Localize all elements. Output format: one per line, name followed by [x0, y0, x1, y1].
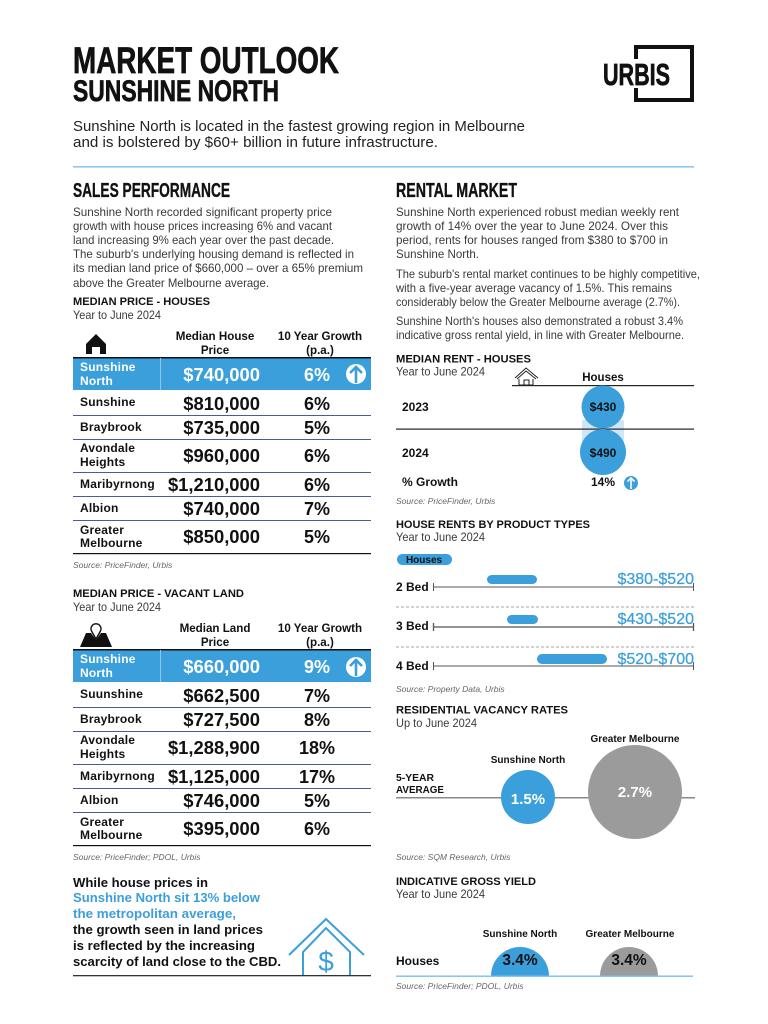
row: Albion: 5%: [304, 791, 330, 811]
text block: sales performance: its median land price of $660,000 – over a 65% premium: [73, 261, 363, 275]
row: Avondale Heights: [80, 441, 330, 469]
text block: rental market: considerably below the Greater Melbourne average (2.7%).: [396, 295, 680, 309]
text block: sales performance: growth with house prices increasing 6% and vacant: [73, 219, 333, 233]
row: Avondale Heights: 6%: [304, 446, 330, 466]
row: Maribyrnong: [80, 474, 330, 495]
half bubble: Sunshine North: Sunshine North: [483, 929, 557, 940]
row: Sunshine North: 6%: [304, 365, 330, 385]
table header: [176, 330, 362, 357]
intro text: Sunshine North is located in the fastest growing region in Melbourne: [73, 118, 525, 135]
source: Source: PriceFinder, Urbis: [396, 496, 496, 506]
row: 4 Bed: [396, 651, 694, 673]
bubble: Greater Melbourne: Greater Melbourne: [591, 734, 680, 745]
callout: the growth seen in land prices: [73, 922, 263, 937]
heading: median price vacant land: MEDIAN PRICE - VACANT LAND: [73, 588, 244, 600]
callout: is reflected by the increasing: [73, 938, 255, 953]
row: Albion: [80, 498, 330, 519]
row: Suunshine: [80, 685, 330, 706]
source: Source: PriceFinder; PDOL, Urbis: [396, 981, 524, 991]
text block: rental market: The suburb's rental market continues to be highly competitive,: [396, 267, 700, 281]
heading: median rent houses: MEDIAN RENT - HOUSES: [396, 354, 531, 366]
heading: vacancy: RESIDENTIAL VACANCY RATES: [396, 704, 568, 716]
row: Albion: $746,000: [183, 790, 260, 811]
source: Source: Property Data, Urbis: [396, 684, 505, 694]
row: 3 Bed: [396, 611, 694, 633]
row: Greater Melbourne: $850,000: [183, 526, 260, 547]
row label: Houses: [396, 954, 440, 968]
half bubble: Sunshine North: [483, 929, 557, 976]
bubble: Greater Melbourne: [588, 734, 682, 839]
row: Greater Melbourne: 5%: [304, 527, 330, 547]
text block: rental market: growth of 14% over the year to June 2024. Over this: [396, 219, 668, 233]
half bubble: Greater Melbourne: [586, 929, 675, 976]
heading: median price houses: Year to June 2024: [73, 308, 161, 322]
bubble: Sunshine North: Sunshine North: [491, 755, 565, 766]
table header: Price: [201, 344, 230, 357]
source: Source: PriceFinder, Urbis: [73, 560, 173, 570]
half bubble: Greater Melbourne: 3.4%: [611, 952, 647, 969]
row: Maribyrnong: 6%: [304, 475, 330, 495]
logo: Urbis: [603, 47, 692, 100]
row: Sunshine North: Sunshine: [80, 652, 136, 666]
row: Sunshine North: North: [80, 666, 113, 680]
heading: yield: Year to June 2024: [396, 887, 485, 901]
panel: indicative gross yield: [396, 876, 693, 991]
row: Sunshine: [80, 393, 330, 414]
row: Braybrook: 8%: [304, 710, 330, 730]
row: Albion: Albion: [80, 793, 119, 807]
row: Greater Melbourne: 6%: [304, 819, 330, 839]
table header: Median Land: [180, 622, 250, 635]
row: 3 Bed: 3 Bed: [396, 619, 429, 633]
row: 4 Bed: $520-$700: [617, 651, 694, 668]
row: Suunshine: 7%: [304, 686, 330, 706]
bubble: Sunshine North: [491, 755, 565, 824]
row: Albion: $740,000: [183, 498, 260, 519]
row: Sunshine North: $740,000: [183, 364, 260, 385]
row: 4 Bed: 4 Bed: [396, 659, 429, 673]
row: Sunshine North: [73, 357, 371, 390]
bubble: 2023: 2023: [402, 400, 429, 414]
heading: house rents: HOUSE RENTS BY PRODUCT TYPES: [396, 519, 590, 531]
row: Sunshine North: $660,000: [183, 656, 260, 677]
row: Sunshine North: [73, 649, 371, 682]
table header: [180, 622, 362, 649]
icon: house with dollar: [289, 919, 364, 977]
row: Sunshine: 6%: [304, 394, 330, 414]
row: Avondale Heights: $960,000: [183, 445, 260, 466]
row: 2 Bed: $380-$520: [617, 571, 694, 588]
text block: rental market: period, rents for houses ranged from $380 to $700 in: [396, 233, 668, 247]
row: Avondale Heights: 18%: [299, 738, 335, 758]
row: Suunshine: Suunshine: [80, 687, 143, 701]
row: Maribyrnong: 17%: [299, 767, 335, 787]
row: Braybrook: $735,000: [183, 417, 260, 438]
row: Greater Melbourne: [80, 523, 330, 550]
row: Greater Melbourne: [80, 815, 330, 842]
row label: [396, 772, 444, 796]
row: Sunshine North: North: [80, 374, 113, 388]
row: Suunshine: $662,500: [183, 685, 260, 706]
row: Albion: Albion: [80, 501, 119, 515]
text block: rental market: Sunshine North experienced robust median weekly rent: [396, 205, 680, 219]
panel: median price vacant land: [73, 588, 371, 862]
bubble: Greater Melbourne: 2.7%: [618, 784, 652, 801]
row: Avondale Heights: Heights: [80, 747, 126, 761]
bubble: 2024: [402, 429, 626, 475]
row: Avondale Heights: Avondale: [80, 733, 135, 747]
row: 3 Bed: $430-$520: [617, 611, 694, 628]
text block: rental market: with a five-year average vacancy of 1.5%. This remains: [395, 281, 672, 295]
title: MARKET OUTLOOK: [73, 40, 339, 81]
row: Braybrook: 5%: [304, 418, 330, 438]
icon: house with dollar: $: [318, 946, 334, 977]
text block: rental market: indicative gross rental yield, in line with Greater Melbourne.: [396, 328, 684, 342]
row: Sunshine North: Sunshine: [80, 360, 136, 374]
source: Source: PriceFinder; PDOL, Urbis: [73, 852, 201, 862]
icon: land pin: [80, 624, 112, 647]
growth row: [402, 475, 638, 490]
intro text: [73, 118, 525, 151]
bubble: 2023: $430: [590, 400, 617, 414]
row: Avondale Heights: $1,288,900: [168, 737, 260, 758]
text block: sales performance: Sunshine North recorded significant property price: [73, 205, 332, 219]
heading: median rent houses: Year to June 2024: [396, 364, 485, 378]
bubble: 2024: 2024: [402, 446, 429, 460]
heading: median price houses: MEDIAN PRICE - HOUSES: [73, 296, 210, 308]
logo: Urbis: URBIS: [603, 57, 670, 92]
table header: Price: [201, 636, 230, 649]
row: Greater Melbourne: Melbourne: [80, 536, 143, 550]
row: Braybrook: Braybrook: [80, 420, 142, 434]
row: Avondale Heights: [80, 733, 335, 761]
row: Greater Melbourne: $395,000: [183, 818, 260, 839]
panel: median price houses: [73, 296, 371, 570]
source: Source: SQM Research, Urbis: [396, 852, 511, 862]
text block: sales performance: The suburb's underlying housing demand is reflected in: [73, 247, 354, 261]
table header: 10 Year Growth: [278, 330, 362, 343]
row label: AVERAGE: [396, 784, 444, 796]
heading: median price vacant land: Year to June 2024: [73, 600, 161, 614]
heading: rental market: RENTAL MARKET: [396, 180, 517, 202]
row: Maribyrnong: Maribyrnong: [80, 769, 155, 783]
growth row: 14%: [591, 475, 615, 489]
table header: (p.a.): [306, 636, 334, 649]
heading: yield: INDICATIVE GROSS YIELD: [396, 876, 536, 888]
row: Braybrook: [80, 709, 330, 730]
callout: While house prices in: [73, 875, 208, 890]
half bubble: Sunshine North: 3.4%: [502, 952, 538, 969]
text block: sales performance: [73, 205, 363, 290]
row: Maribyrnong: [80, 766, 335, 787]
row: Braybrook: $727,500: [183, 709, 260, 730]
heading: median price vacant land: [73, 588, 244, 614]
row: Maribyrnong: $1,125,000: [168, 766, 260, 787]
icon: house: [86, 334, 106, 354]
panel: median rent houses: [396, 354, 694, 506]
row: Sunshine North: 9%: [304, 657, 330, 677]
band between circles: [582, 420, 624, 445]
text block: sales performance: above the Greater Melbourne average.: [73, 276, 269, 290]
legend pill: [397, 554, 452, 566]
heading: vacancy: [396, 704, 568, 730]
half bubble: Greater Melbourne: Greater Melbourne: [586, 929, 675, 940]
title: [73, 40, 339, 108]
row: Greater Melbourne: Greater: [80, 815, 124, 829]
column label: Houses: [582, 372, 624, 384]
heading: house rents: Year to June 2024: [396, 530, 485, 544]
panel: residential vacancy rates: [396, 704, 695, 862]
intro text: and is bolstered by $60+ billion in future infrastructure.: [73, 134, 438, 151]
icon: house outline: [515, 368, 538, 385]
row: Greater Melbourne: Melbourne: [80, 828, 143, 842]
row: 2 Bed: 2 Bed: [396, 580, 429, 594]
table header: Median House: [176, 330, 255, 343]
row label: 5-YEAR: [396, 772, 434, 784]
heading: yield: [396, 876, 536, 901]
row: 2 Bed: [396, 571, 694, 594]
row: Sunshine: Sunshine: [80, 395, 136, 409]
row: Albion: 7%: [304, 499, 330, 519]
heading: sales performance: SALES PERFORMANCE: [73, 180, 230, 202]
heading: median rent houses: [396, 354, 531, 378]
row: Maribyrnong: $1,210,000: [168, 474, 260, 495]
text block: rental market: [395, 205, 700, 342]
heading: vacancy: Up to June 2024: [396, 716, 477, 730]
text block: rental market: Sunshine North's houses also demonstrated a robust 3.4%: [396, 314, 683, 328]
row: Avondale Heights: Avondale: [80, 441, 135, 455]
callout: the metropolitan average,: [73, 906, 236, 921]
row: Albion: [80, 790, 330, 811]
bubble: Sunshine North: 1.5%: [511, 791, 545, 808]
table header: (p.a.): [306, 344, 334, 357]
growth row: % Growth: [402, 475, 458, 489]
bubble: 2023: [402, 386, 624, 428]
row: Braybrook: [80, 417, 330, 438]
row: Sunshine: $810,000: [183, 393, 260, 414]
row: Avondale Heights: Heights: [80, 455, 126, 469]
text block: sales performance: land increasing 9% each year over the past decade.: [73, 233, 334, 247]
title: SUNSHINE NORTH: [73, 75, 279, 108]
callout: [73, 875, 371, 977]
callout: Sunshine North sit 13% below: [73, 890, 261, 905]
heading: median price houses: [73, 296, 210, 322]
row: Greater Melbourne: Greater: [80, 523, 124, 537]
table header: 10 Year Growth: [278, 622, 362, 635]
callout: scarcity of land close to the CBD.: [73, 954, 281, 969]
heading: house rents: [396, 519, 590, 544]
panel: house rents by product types: [396, 519, 694, 694]
bubble: 2024: $490: [590, 446, 617, 460]
row: Braybrook: Braybrook: [80, 712, 142, 726]
legend pill: Houses: [406, 555, 442, 566]
text block: rental market: Sunshine North.: [396, 247, 479, 261]
row: Maribyrnong: Maribyrnong: [80, 477, 155, 491]
